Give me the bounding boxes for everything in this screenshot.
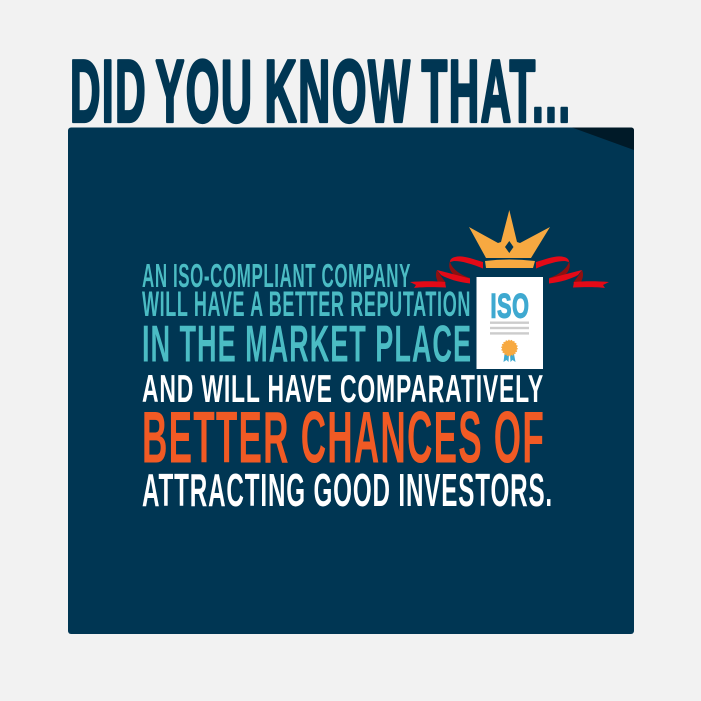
text block: message (142, 258, 553, 516)
icon: right ribbon (536, 256, 609, 288)
panel: main card (68, 128, 634, 634)
title: DID (70, 42, 147, 140)
title: YOU (156, 42, 254, 140)
title: KNOW (264, 42, 412, 140)
title (70, 42, 572, 140)
folded corner (572, 128, 634, 150)
certificate ISO label: ISO (490, 288, 530, 326)
icon: ISO certificate (476, 277, 543, 369)
line 1: AN ISO-COMPLIANT COMPANY (142, 258, 411, 295)
icon: left ribbon (410, 256, 483, 288)
certificate text lines (490, 322, 529, 335)
certificate seal (502, 340, 517, 362)
icon: crown (469, 210, 550, 268)
